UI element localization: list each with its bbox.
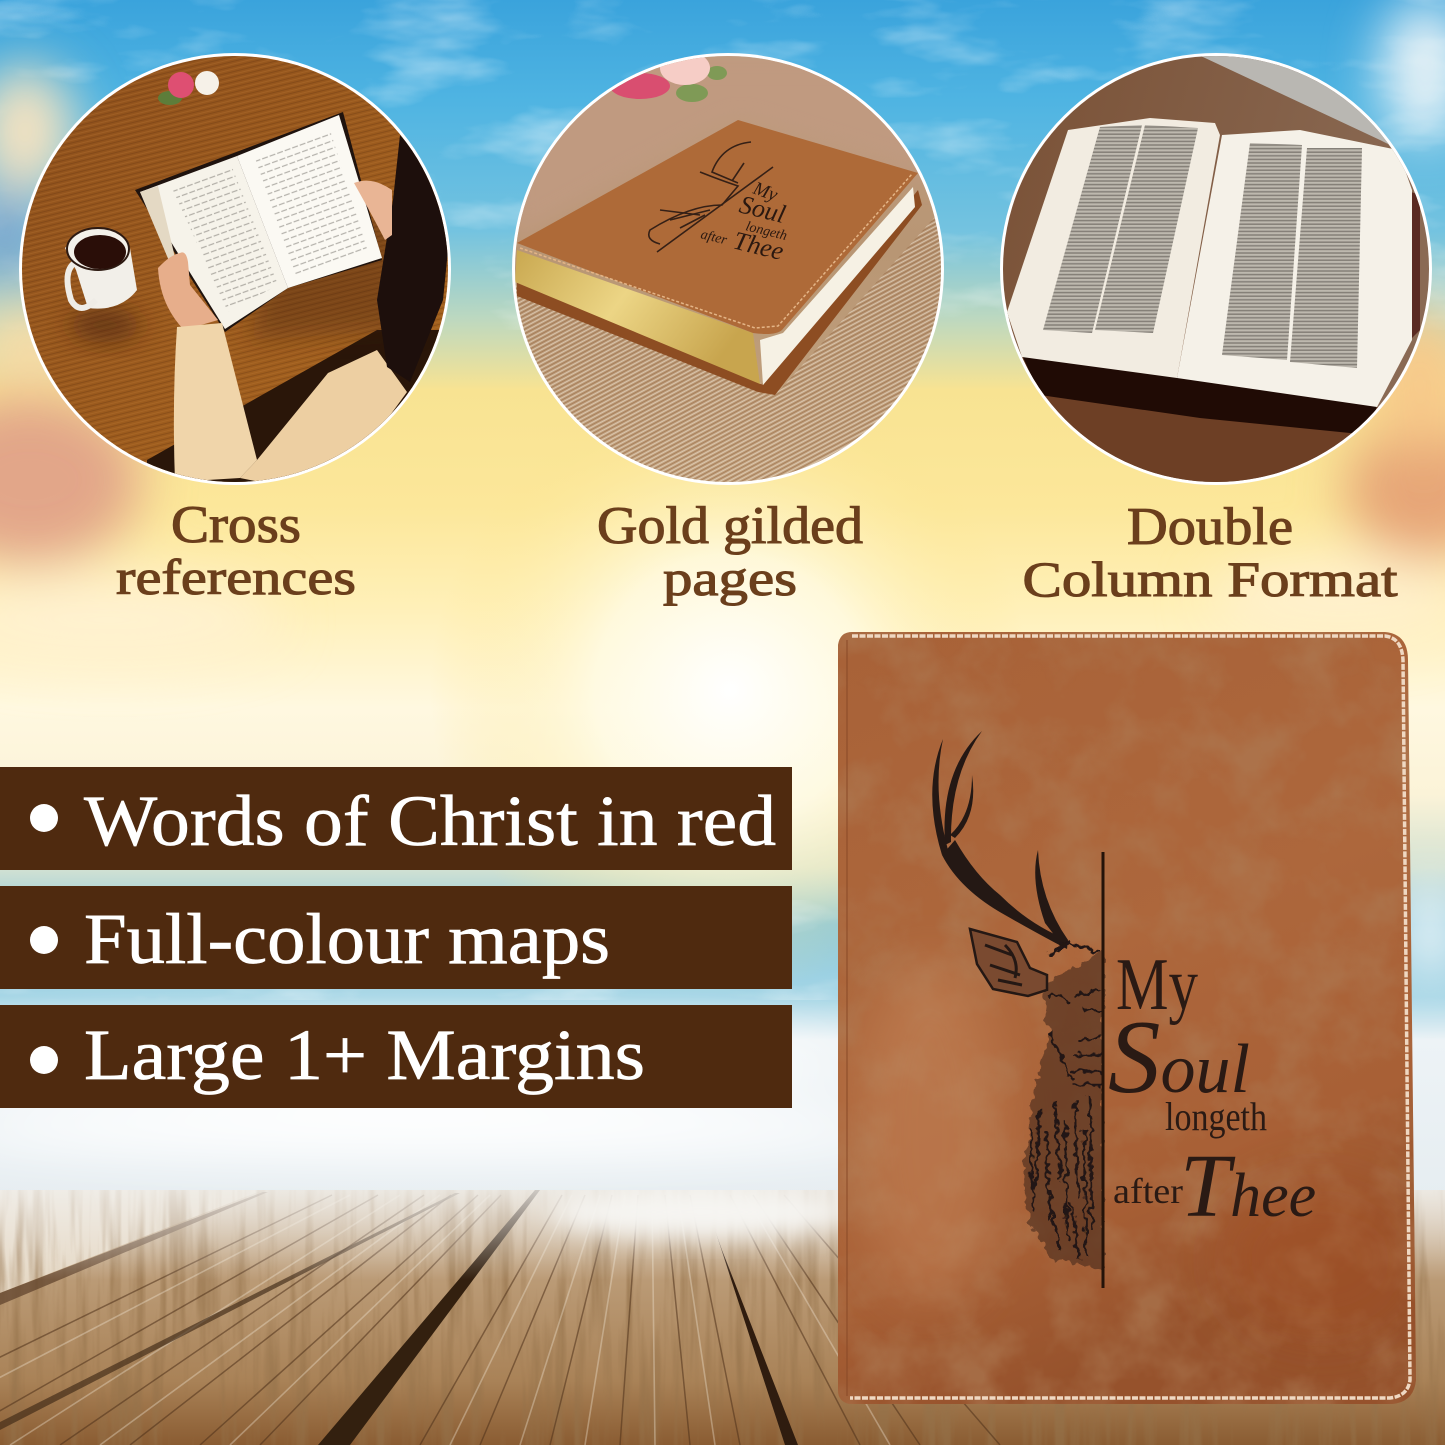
gilded page block	[515, 250, 760, 384]
white fore-edge	[760, 187, 915, 385]
spine hinge	[846, 640, 848, 1396]
engraved text on cover: after	[699, 227, 729, 248]
engraved text: my soul longeth after thee: My	[1116, 944, 1198, 1026]
left hand	[158, 252, 218, 330]
caption: gold gilded pages	[597, 497, 863, 606]
engraved text: my soul longeth after thee: after	[1113, 1171, 1183, 1211]
caption: cross references: Cross	[171, 496, 301, 554]
caption: gold gilded pages: pages	[663, 550, 797, 606]
caption: cross references: references	[116, 549, 356, 605]
knit sleeve	[174, 323, 257, 482]
engraved stag on cover	[649, 142, 773, 252]
engraved text on cover: Soul	[737, 190, 788, 229]
right hand	[354, 181, 392, 240]
caption: double column format: Column Format	[1022, 551, 1398, 607]
left page text columns	[1043, 125, 1198, 333]
long dark hair	[377, 135, 448, 382]
ribbon and cover edge	[1405, 190, 1420, 345]
photo circle: gold gilded pages	[510, 50, 950, 490]
caption: double column format: Double	[1127, 498, 1293, 556]
book shadow	[1022, 355, 1377, 435]
right page	[1177, 130, 1412, 407]
leather cover	[517, 120, 918, 334]
photo circle: cross references	[15, 50, 460, 500]
photo circle: double column format	[998, 50, 1440, 490]
feature bar: large margins: Large 1+ Margins	[84, 1015, 645, 1095]
leather bible cover	[838, 632, 1420, 1407]
stitched edge	[850, 636, 1410, 1398]
divider line	[1102, 852, 1104, 1288]
engraved text: my soul longeth after thee: Soul	[1108, 998, 1250, 1115]
coffee cup	[65, 228, 140, 343]
cover stitching	[520, 174, 912, 328]
caption: gold gilded pages: Gold gilded	[597, 497, 863, 555]
wooden deck foreground	[0, 1185, 1445, 1445]
engraved text: my soul longeth after thee	[1108, 944, 1316, 1236]
engraved text: my soul longeth after thee: Thee	[1180, 1137, 1316, 1236]
engraved text on cover: Thee	[731, 226, 787, 266]
engraved text on cover: My	[749, 178, 781, 206]
open bible	[135, 112, 382, 332]
left page	[1007, 118, 1220, 378]
back cover edge	[517, 190, 922, 395]
flowers on table	[158, 71, 219, 105]
feature bar: full-colour maps	[0, 886, 792, 989]
engraved text on cover: longeth	[744, 219, 788, 244]
feature bar: words of Christ in red	[0, 767, 792, 870]
right page text columns	[1222, 143, 1362, 368]
caption: double column format	[1022, 498, 1398, 607]
engraved text on cover	[700, 182, 787, 259]
sweater body	[240, 350, 407, 490]
caption: cross references	[116, 496, 356, 605]
engraved text: my soul longeth after thee: longeth	[1165, 1094, 1267, 1139]
feature bar: large margins	[0, 1005, 792, 1108]
feature bar: words of Christ in red: Words of Christ in red	[84, 781, 776, 861]
feature bar: full-colour maps: Full-colour maps	[84, 899, 610, 979]
flowers	[610, 51, 727, 102]
icon: stag head engraving	[932, 731, 1103, 1269]
